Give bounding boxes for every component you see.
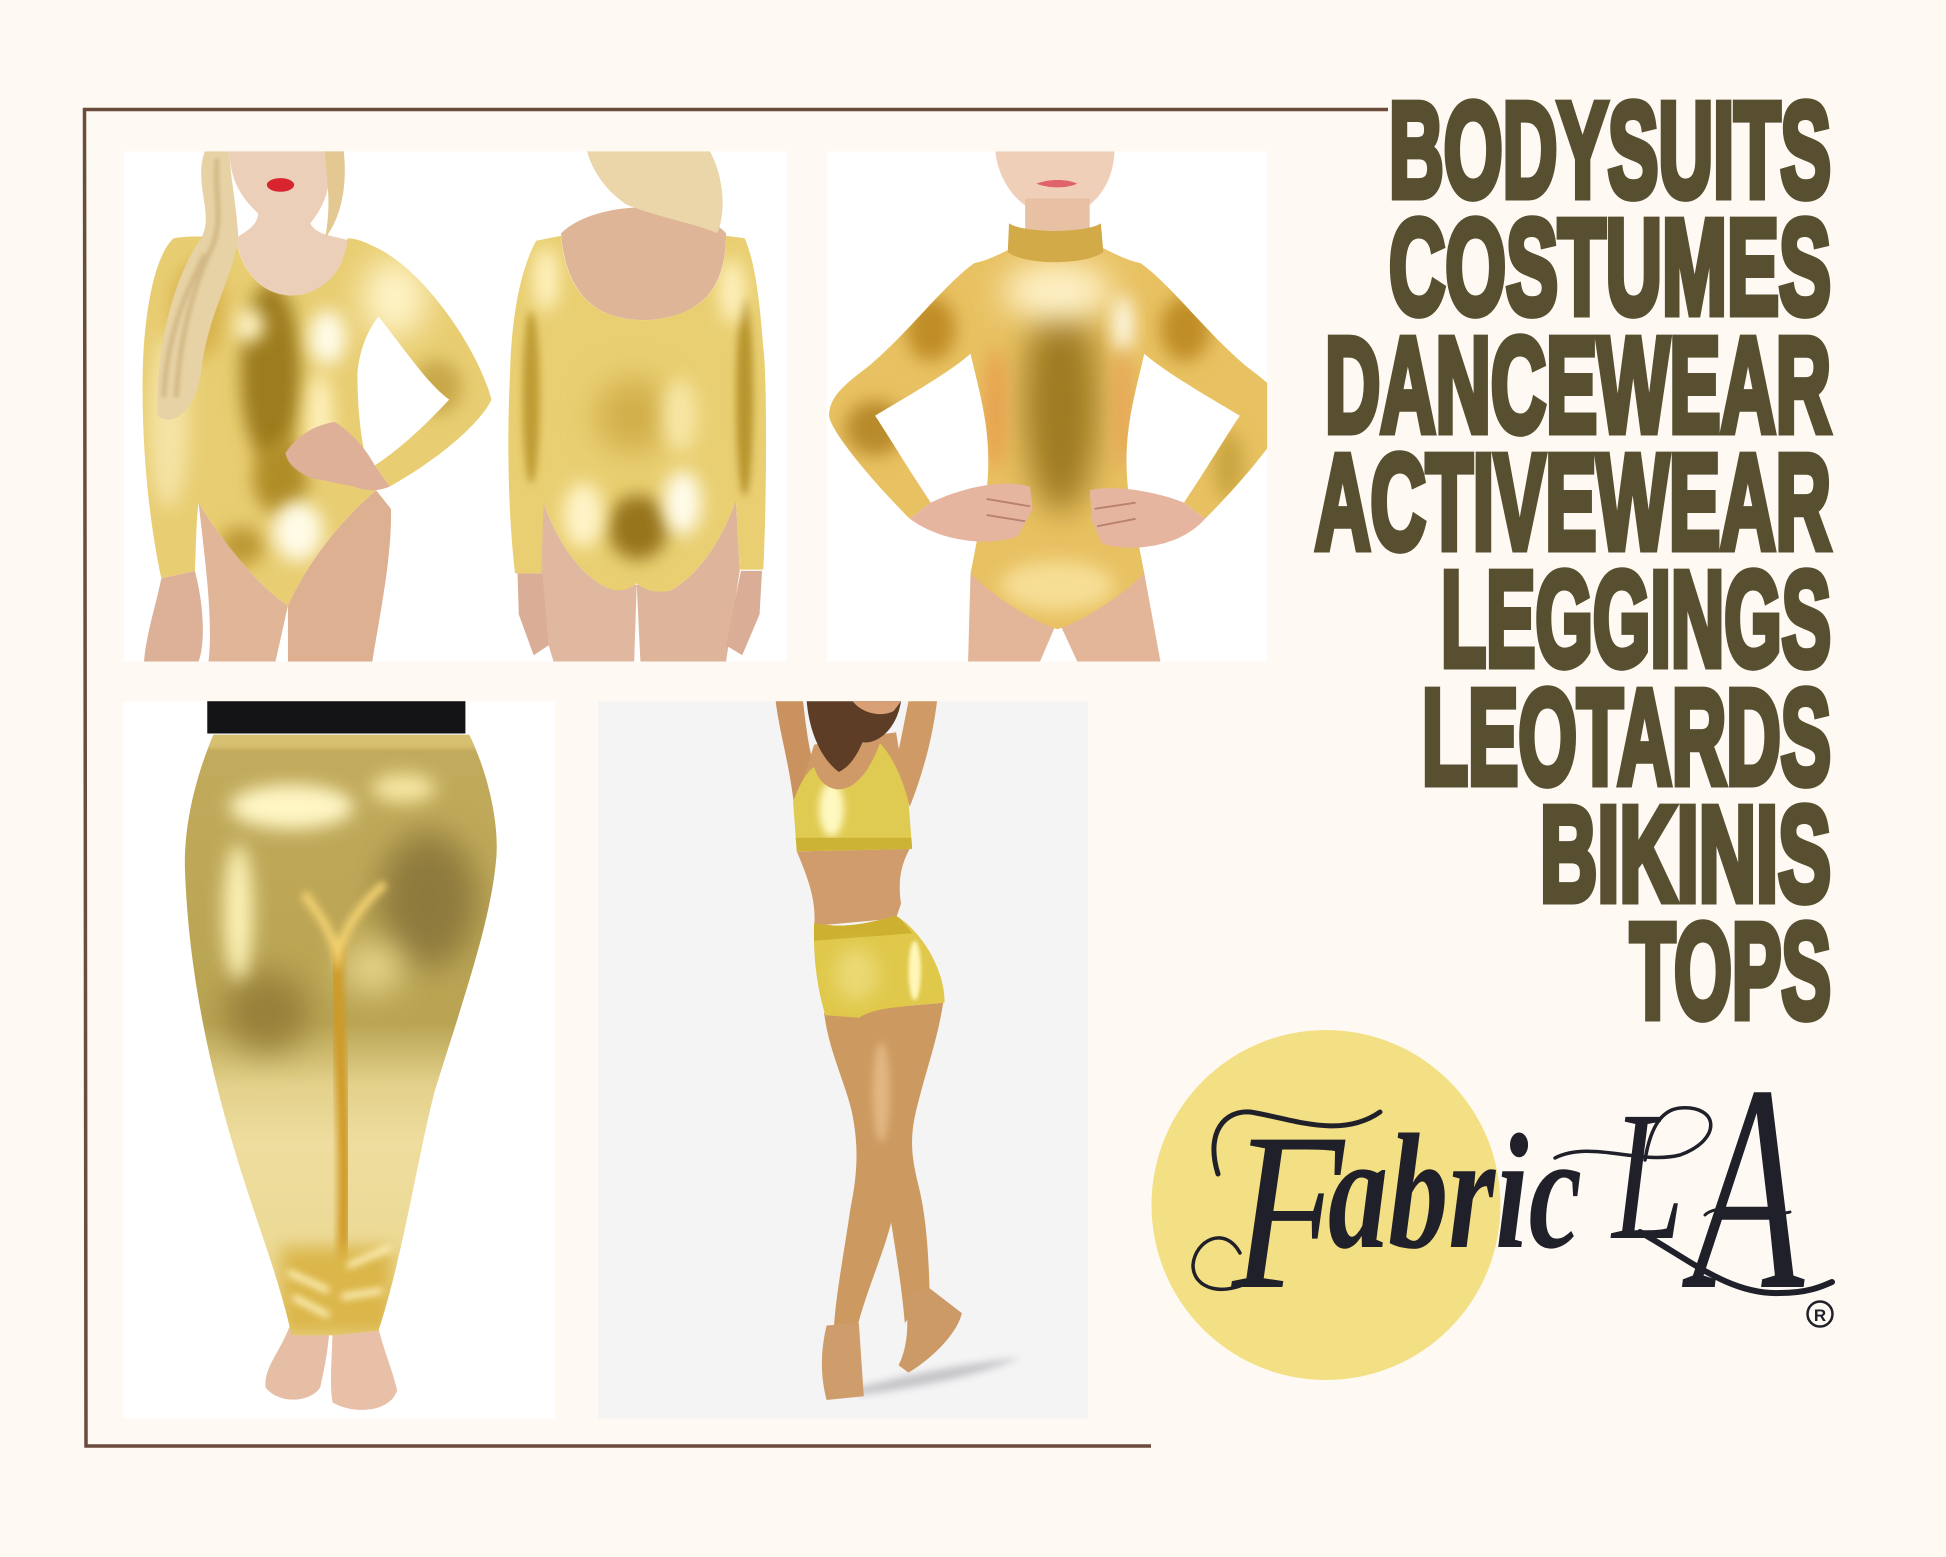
yellow logo circle bbox=[1152, 1030, 1500, 1380]
logo: FabricLA script wordmark: F bbox=[1230, 1086, 1346, 1336]
lips bbox=[267, 178, 294, 192]
logo: FabricLA script wordmark: L bbox=[1610, 1074, 1684, 1279]
dancer body bbox=[776, 701, 962, 1400]
infographic canvas bbox=[82, 98, 1835, 1448]
photo: dancer in gold crop top and shorts bbox=[598, 701, 1088, 1419]
photo: gold metallic leggings bbox=[123, 701, 555, 1419]
collar bbox=[1008, 223, 1103, 262]
registered trademark mark: R bbox=[1814, 1306, 1826, 1325]
brown frame bbox=[84, 110, 1388, 1446]
logo: FabricLA script wordmark: A bbox=[1681, 1024, 1807, 1351]
logo: FabricLA script wordmark bbox=[1193, 1024, 1832, 1351]
shorts bbox=[807, 913, 945, 1018]
logo: FabricLA script wordmark: abric bbox=[1328, 1100, 1582, 1283]
logo swashes bbox=[1193, 1108, 1832, 1293]
hands bbox=[910, 484, 1205, 548]
figure: front view model bbox=[143, 151, 491, 662]
photo: gold mock-neck bodysuit bbox=[827, 151, 1286, 662]
floor shadow bbox=[859, 1358, 1020, 1395]
crop top bbox=[793, 743, 912, 851]
figure: back view model bbox=[508, 151, 766, 662]
category list bbox=[1315, 74, 1831, 1046]
photo: gold long-sleeve bodysuit front and back bbox=[123, 151, 787, 662]
registered trademark mark bbox=[1808, 1302, 1832, 1326]
hair bbox=[157, 151, 345, 420]
